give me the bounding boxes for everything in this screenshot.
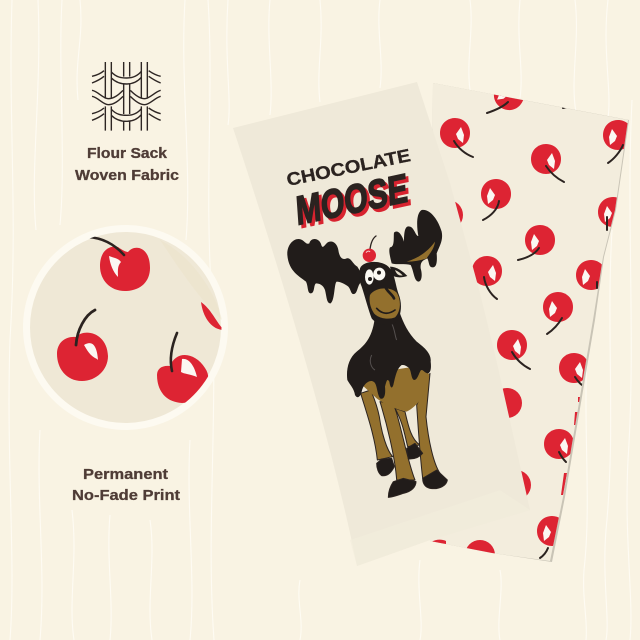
panel: back towel with cherries — [430, 75, 633, 570]
cherry: edge sliver — [201, 302, 222, 330]
cherry: top — [88, 237, 150, 291]
heading: flour sack woven fabric: Woven Fabric — [75, 167, 179, 184]
cherry: right — [157, 333, 208, 403]
title: moose: MOOSE — [297, 168, 412, 237]
panel: cherry print close-up circle — [26, 228, 224, 426]
chocolate on neck — [347, 312, 431, 399]
cherry on nose — [363, 236, 376, 262]
illustration: chocolate moose — [287, 210, 447, 497]
moose legs and body — [357, 367, 447, 497]
panel: front towel — [233, 82, 530, 566]
heading: flour sack woven fabric — [75, 145, 179, 184]
heading: permanent no-fade print: No-Fade Print — [72, 487, 180, 504]
heading: permanent no-fade print — [72, 466, 180, 504]
title: moose: MOOSE — [294, 165, 409, 234]
icon: woven fabric — [92, 62, 161, 131]
heading: flour sack woven fabric: Flour Sack — [87, 145, 168, 162]
antlers and head — [287, 210, 442, 325]
cherry pattern — [431, 75, 633, 570]
heading: permanent no-fade print: Permanent — [83, 466, 168, 483]
eyes — [365, 268, 385, 285]
title: chocolate: CHOCOLATE — [285, 145, 412, 190]
cherry: left — [57, 310, 108, 381]
